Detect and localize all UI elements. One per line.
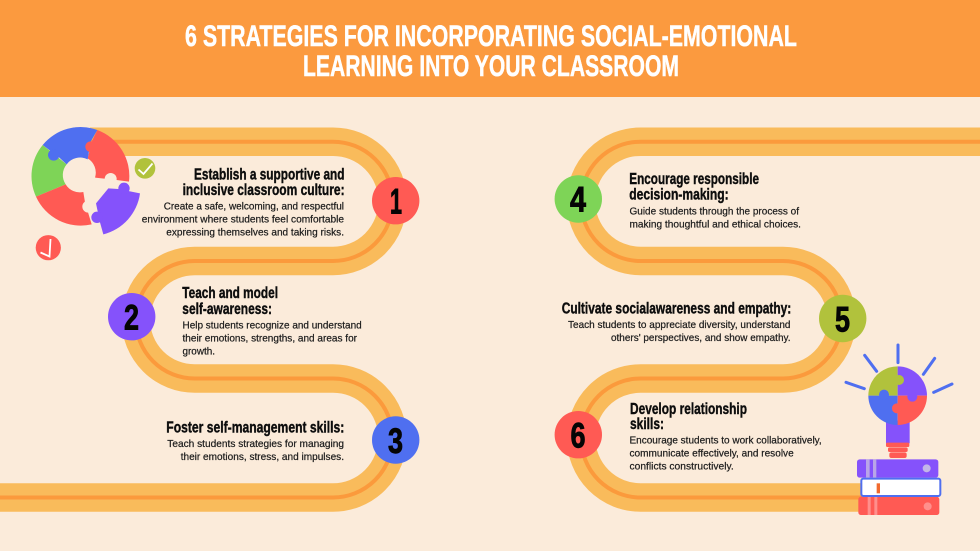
step 6: Develop relationship — [630, 401, 747, 418]
step 2: their emotions, strengths, and areas for — [182, 334, 358, 344]
step 2 — [108, 285, 362, 358]
step 3 — [166, 416, 419, 464]
step 4 — [555, 171, 801, 230]
step 6: communicate effectively, and resolve — [630, 448, 794, 460]
step 2: Help students recognize and understand — [182, 320, 362, 332]
light rays — [846, 345, 952, 392]
step 4: making thoughtful and ethical choices. — [630, 220, 801, 230]
step 2: 2 — [124, 298, 139, 338]
icon: red check badge — [36, 235, 61, 260]
step 3: their emotions, stress, and impulses. — [181, 452, 344, 463]
step 2: Teach and model — [182, 285, 278, 302]
icon: puzzle light bulb on books — [846, 345, 952, 515]
step 6: 6 — [570, 416, 586, 456]
title — [185, 20, 797, 83]
step 4: Encourage responsible — [629, 171, 759, 188]
step 2: growth. — [182, 346, 215, 358]
step 6: conflicts constructively. — [630, 462, 734, 472]
step 5: others' perspectives, and show empathy. — [611, 333, 790, 344]
header banner — [0, 0, 980, 97]
step 3: Foster self-management skills: — [166, 420, 344, 437]
step 3: 3 — [388, 422, 403, 461]
step 4: decision-making: — [629, 186, 729, 204]
step 1: Create a safe, welcoming, and respectful — [164, 202, 344, 212]
title: LEARNING INTO YOUR CLASSROOM — [303, 50, 679, 83]
step 1: expressing themselves and taking risks. — [166, 228, 344, 238]
step 1: inclusive classroom culture: — [183, 182, 345, 199]
step 4: Guide students through the process of — [630, 206, 799, 218]
step 6: skills: — [630, 416, 664, 433]
step 3: Teach students strategies for managing — [167, 439, 344, 450]
bulb — [868, 366, 927, 458]
book stack — [857, 459, 940, 515]
step 4: 4 — [570, 180, 586, 220]
right winding path — [581, 142, 980, 498]
step 1 — [142, 166, 419, 238]
step 5: Cultivate socialawareness and empathy: — [562, 300, 791, 317]
step 5 — [562, 295, 866, 344]
icon: puzzle ring — [31, 127, 140, 234]
step 2: self-awareness: — [182, 301, 272, 318]
left winding path — [0, 142, 393, 498]
step 1: Establish a supportive and — [194, 166, 344, 184]
step 1: 1 — [390, 182, 402, 222]
icon: olive check badge — [135, 158, 155, 179]
step 1: environment where students feel comfortable — [142, 214, 344, 226]
step 5: 5 — [835, 300, 850, 340]
step 6 — [555, 401, 822, 472]
step 6: Encourage students to work collaboratively, — [630, 436, 822, 446]
step 5: Teach students to appreciate diversity, understand — [568, 320, 791, 331]
